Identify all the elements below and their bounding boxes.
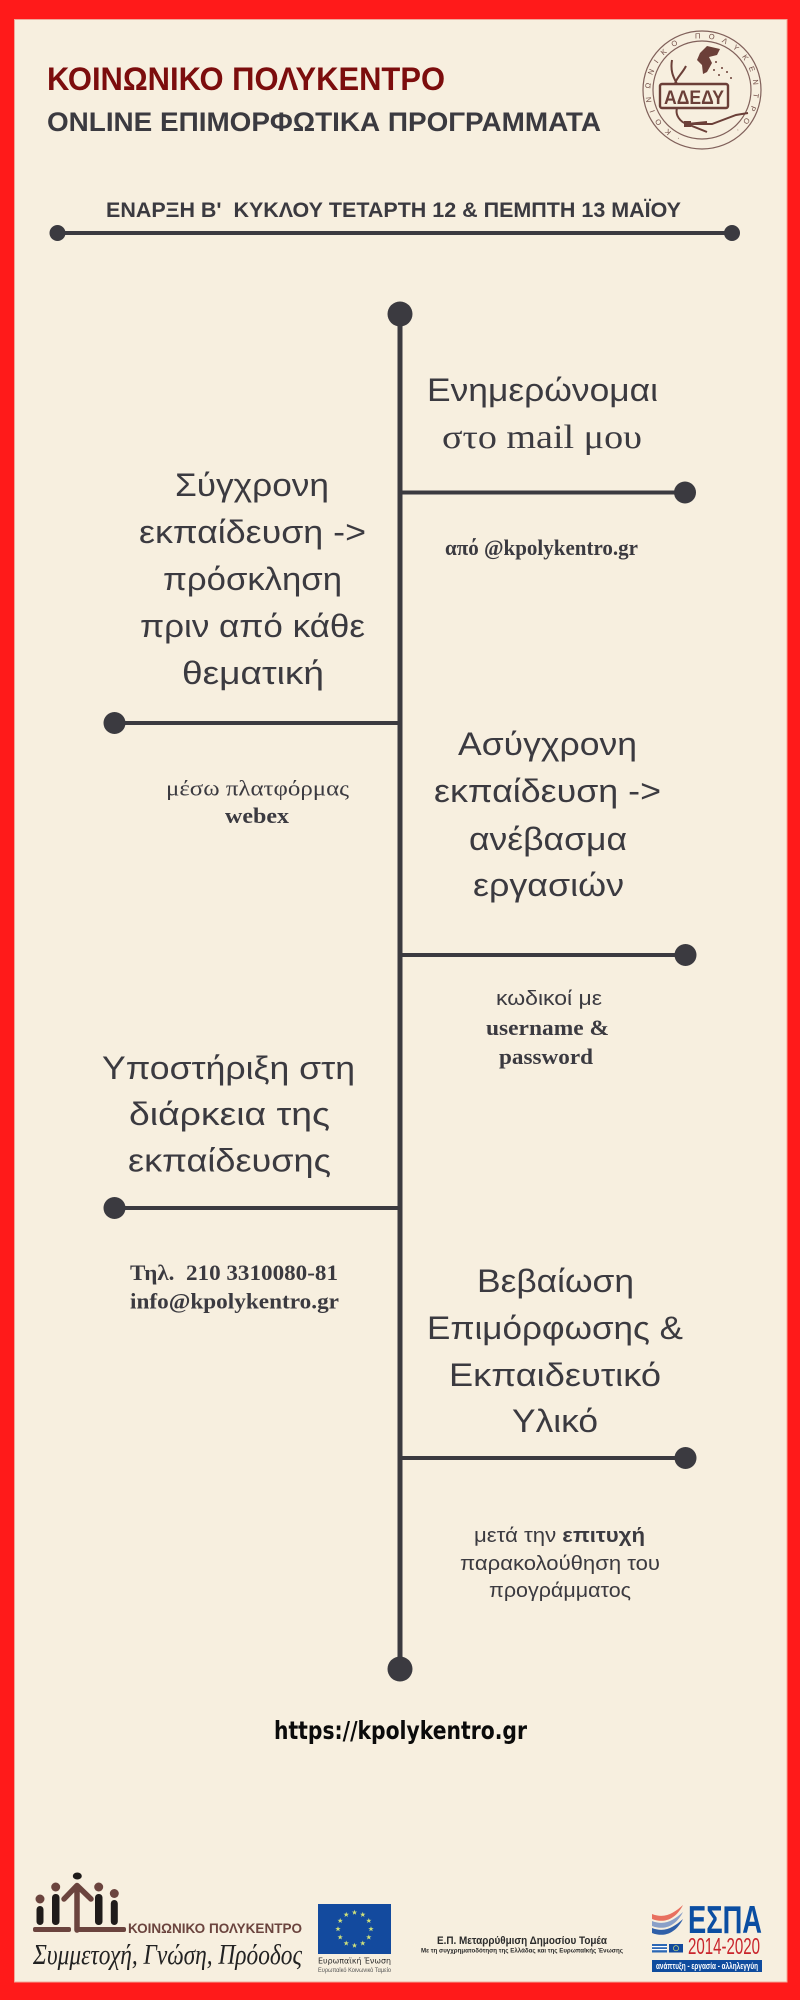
step: asynchronous training: κωδικοί με — [496, 988, 602, 1010]
step: certificate: Βεβαίωση — [477, 1263, 634, 1299]
icon: round ΑΔΕΔΥ logo: ·ΚΟΙΝΩΝΙΚΟ ΠΟΛΥΚΕΝΤΡΟ· — [645, 33, 759, 139]
step: support: διάρκεια της — [129, 1096, 330, 1132]
step: certificate: Υλικό — [512, 1403, 598, 1439]
step: support: εκπαίδευσης — [128, 1142, 331, 1178]
step: synchronous training: πρόσκληση — [163, 561, 342, 597]
step: asynchronous training: εκπαίδευση -> — [434, 773, 661, 809]
logo: Κοινωνικό Πολύκεντρο — [32, 1872, 302, 1971]
step: certificate: παρακολούθηση του — [460, 1553, 660, 1575]
title — [47, 61, 601, 137]
title: ΚΟΙΝΩΝΙΚΟ ΠΟΛΥΚΕΝΤΡΟ — [47, 61, 445, 97]
programme credit — [421, 1935, 623, 1954]
step: synchronous training: πριν από κάθε — [140, 608, 365, 644]
step: certificate: Εκπαιδευτικό — [449, 1357, 661, 1393]
step: asynchronous training: password — [499, 1044, 593, 1069]
programme credit: Ε.Π. Μεταρρύθμιση Δημοσίου Τομέα — [437, 1935, 607, 1947]
icon: round ΑΔΕΔΥ logo: ΑΔΕΔΥ — [664, 88, 724, 109]
logo: ΕΣΠΑ 2014-2020: ανάπτυξη - εργασία - αλληλεγγύη — [656, 1961, 758, 1971]
vertical timeline — [388, 302, 412, 1682]
logo: ΕΣΠΑ 2014-2020 — [652, 1899, 762, 1972]
logo: ΕΣΠΑ 2014-2020: 2014-2020 — [688, 1933, 760, 1959]
step: certificate: μετά την επιτυχή — [474, 1525, 645, 1547]
step: synchronous training: webex — [225, 803, 289, 828]
programme credit: Με τη συγχρηματοδότηση της Ελλάδας και της Ευρωπαϊκής Ένωσης — [421, 1948, 623, 1954]
logo: EU flag — [318, 1904, 392, 1974]
step: certificate: Επιμόρφωσης & — [427, 1310, 683, 1346]
logo: EU flag: Ευρωπαϊκό Κοινωνικό Ταμείο — [318, 1967, 392, 1974]
step: support: Υποστήριξη στη — [102, 1050, 355, 1086]
date divider with end dots — [50, 225, 740, 241]
step: support: info@kpolykentro.gr — [130, 1288, 339, 1314]
step: synchronous training: θεματική — [182, 655, 324, 691]
logo: ΕΣΠΑ 2014-2020: ΕΣΠΑ — [688, 1899, 762, 1942]
step: support: Τηλ. 210 3310080-81 — [130, 1260, 338, 1285]
subheading: start date: ΕΝΑΡΞΗ Β' ΚΥΚΛΟΥ ΤΕΤΑΡΤΗ 12 & ΠΕΜΠΤΗ 13 ΜΑΪΟΥ — [106, 199, 681, 222]
step: synchronous training — [104, 467, 400, 828]
step: certificate — [400, 1263, 696, 1602]
step: asynchronous training: ανέβασμα — [469, 821, 627, 857]
step: synchronous training: Σύγχρονη — [175, 467, 329, 503]
step: certificate: προγράμματος — [489, 1580, 631, 1602]
title: ONLINE ΕΠΙΜΟΡΦΩΤΙΚΑ ΠΡΟΓΡΑΜΜΑΤΑ — [47, 107, 601, 137]
step: mail notification: από @kpolykentro.gr — [445, 535, 638, 560]
step: mail notification — [400, 372, 696, 560]
step: asynchronous training: εργασιών — [473, 867, 624, 903]
logo: Κοινωνικό Πολύκεντρο: Συμμετοχή, Γνώση, Πρόοδος — [32, 1939, 302, 1971]
step: synchronous training: εκπαίδευση -> — [139, 514, 366, 550]
logo: EU flag: Ευρωπαϊκή Ένωση — [318, 1956, 391, 1966]
step: asynchronous training: Ασύγχρονη — [458, 726, 637, 762]
step: asynchronous training: username & — [486, 1015, 609, 1040]
logo: Κοινωνικό Πολύκεντρο: ΚΟΙΝΩΝΙΚΟ ΠΟΛΥΚΕΝΤΡΟ — [128, 1920, 302, 1936]
step: asynchronous training — [400, 726, 696, 1069]
step: synchronous training: μέσω πλατφόρμας — [166, 776, 349, 800]
step: mail notification: Ενημερώνομαι — [427, 372, 658, 408]
step: support — [102, 1050, 400, 1314]
step: mail notification: στο mail μου — [442, 419, 642, 456]
website link: https://kpolykentro.gr — [274, 1716, 528, 1745]
